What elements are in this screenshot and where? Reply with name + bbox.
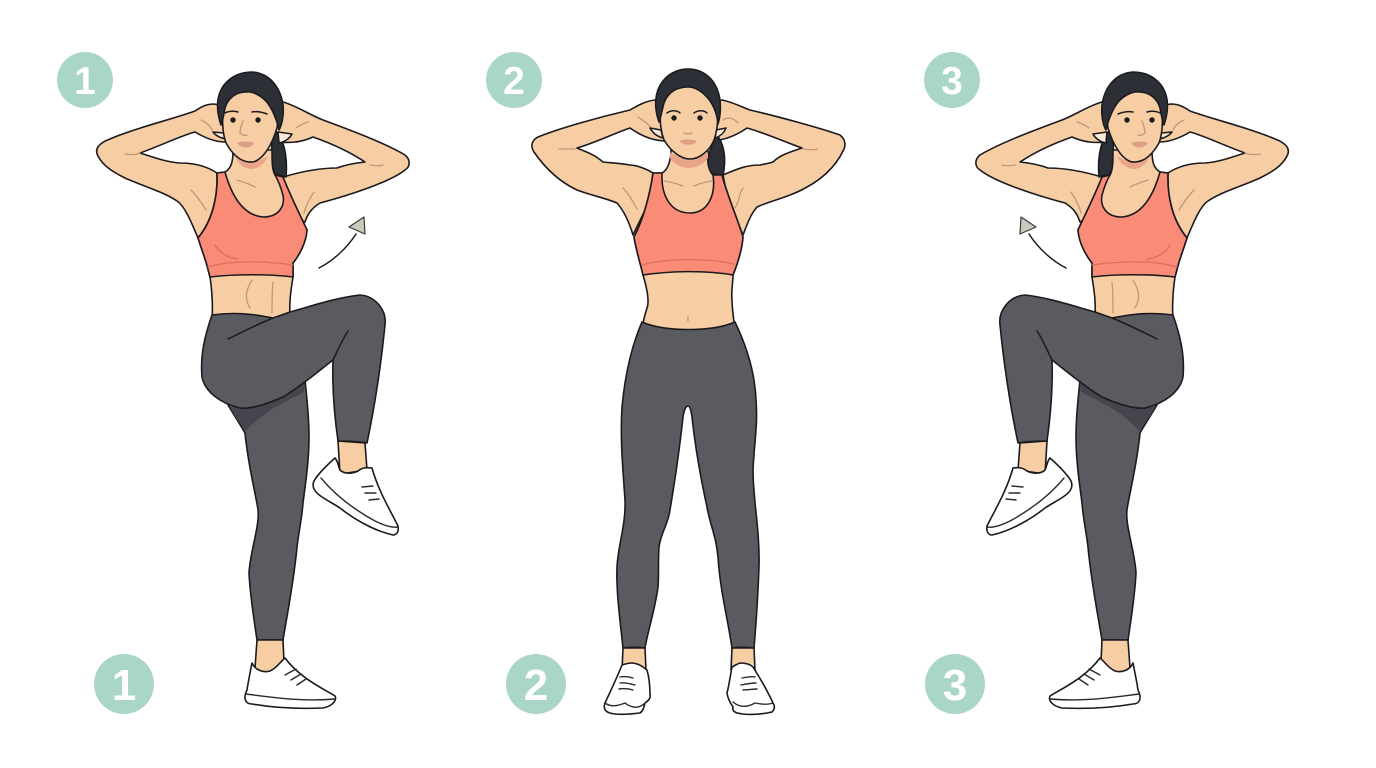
right arm behind head bbox=[976, 102, 1113, 222]
collarbone bbox=[664, 181, 712, 186]
fingertip bbox=[278, 132, 292, 143]
bra band seam bbox=[642, 260, 734, 265]
fingertip bbox=[650, 128, 663, 138]
right shoe bbox=[727, 663, 774, 714]
collarbone bbox=[237, 180, 255, 187]
badge: step 2 bottom bbox=[506, 654, 566, 714]
ponytail bbox=[1099, 130, 1114, 177]
bra band seam bbox=[1092, 245, 1177, 267]
arm creases bbox=[125, 120, 383, 213]
fingertip bbox=[1159, 132, 1172, 139]
ponytail bbox=[271, 130, 286, 177]
sports bra bbox=[634, 173, 743, 275]
raised foot shoe bbox=[987, 458, 1072, 535]
badge: step 2 top: 2 bbox=[503, 60, 525, 103]
face bbox=[1107, 90, 1162, 162]
legging fold lines bbox=[228, 318, 348, 360]
left arm behind head bbox=[1159, 104, 1288, 238]
badge: step 1 bottom bbox=[94, 654, 154, 714]
hair bbox=[218, 72, 283, 130]
right ankle bbox=[731, 648, 755, 670]
facial features bbox=[225, 111, 267, 148]
right arm behind head bbox=[712, 100, 845, 235]
badge: step 3 top bbox=[924, 52, 980, 108]
standing foot shoe bbox=[245, 658, 336, 708]
figure 3: left knee raised (mirror of figure 1) bbox=[976, 72, 1288, 708]
standing foot ankle bbox=[1101, 640, 1130, 676]
right arm behind head bbox=[272, 102, 409, 222]
fingertip bbox=[1093, 132, 1107, 143]
ponytail bbox=[707, 134, 725, 176]
raised foot ankle bbox=[1018, 441, 1047, 474]
standing leg legging bbox=[1076, 380, 1157, 640]
left ankle bbox=[622, 648, 646, 670]
badge: step 1 top: 1 bbox=[74, 60, 96, 103]
torso bbox=[1078, 150, 1187, 322]
face bbox=[223, 90, 278, 162]
arm creases bbox=[1002, 120, 1260, 213]
fingertip bbox=[715, 128, 726, 138]
standing foot shoe bbox=[1050, 658, 1140, 708]
thigh shadow bbox=[230, 381, 305, 431]
figure 1: right knee raised bbox=[97, 72, 409, 708]
navel bbox=[687, 316, 689, 321]
standing foot ankle bbox=[255, 640, 284, 676]
left arm behind head bbox=[97, 104, 226, 238]
badge: step 1 top bbox=[57, 52, 113, 108]
torso bbox=[198, 150, 307, 322]
torso bbox=[634, 150, 743, 330]
raised foot ankle bbox=[338, 441, 367, 474]
bra band seam bbox=[208, 245, 293, 267]
raised leg legging bbox=[202, 295, 385, 443]
face bbox=[660, 86, 718, 159]
left shoe bbox=[604, 663, 650, 714]
badge: step 3 top: 3 bbox=[941, 60, 963, 103]
abdominal lines bbox=[246, 280, 273, 313]
facial features bbox=[667, 111, 707, 145]
left arm behind head bbox=[532, 100, 664, 235]
raised foot shoe bbox=[313, 458, 398, 535]
facial features bbox=[1118, 111, 1160, 148]
abdominal lines bbox=[1112, 280, 1139, 313]
badge: step 2 bottom: 2 bbox=[524, 661, 548, 710]
standing leg legging bbox=[228, 380, 309, 640]
thigh shadow bbox=[1080, 381, 1155, 431]
sports bra bbox=[1078, 172, 1187, 277]
figure 2: standing neutral bbox=[532, 69, 845, 714]
neck shadow bbox=[236, 156, 268, 169]
sports bra bbox=[198, 172, 307, 277]
hair bbox=[656, 69, 720, 124]
collarbone bbox=[1130, 180, 1148, 187]
badge: step 1 bottom: 1 bbox=[112, 661, 136, 710]
movement arrow bbox=[1020, 217, 1066, 268]
neck shadow bbox=[670, 152, 708, 168]
arm creases bbox=[559, 117, 817, 209]
hair bbox=[1102, 72, 1167, 130]
raised leg legging bbox=[1000, 295, 1183, 443]
badge: step 2 top bbox=[486, 52, 542, 108]
badge: step 3 bottom: 3 bbox=[943, 661, 967, 710]
leggings bbox=[617, 322, 759, 648]
neck shadow bbox=[1117, 156, 1149, 169]
badge: step 3 bottom bbox=[925, 654, 985, 714]
fingertip bbox=[213, 132, 226, 139]
legging fold lines bbox=[1037, 318, 1157, 360]
movement arrow bbox=[319, 217, 365, 268]
